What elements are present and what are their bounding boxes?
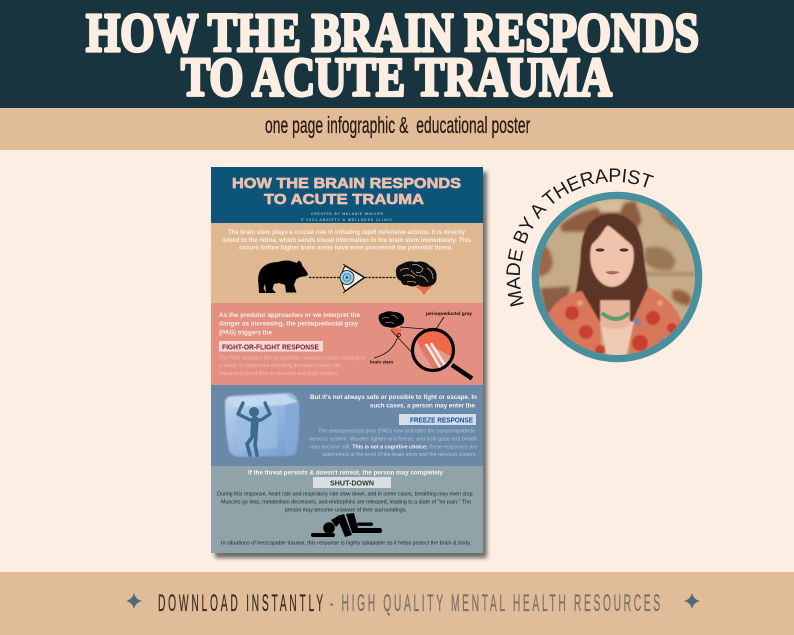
icon: collapsed person [311, 513, 382, 537]
intro text: occurs before higher brain areas have even processed the potential threat. [239, 246, 453, 252]
poster credits: CREATED BY MELANIE WALKER [311, 212, 384, 216]
freeze body text: determined at the level of the brain stem and the nervous system. [322, 452, 477, 458]
fight body text: enhanced blood flow to muscles and pupil dilation. [219, 371, 339, 377]
curved label: made by a therapist: MADE BY A THERAPIST [506, 168, 654, 307]
panel: poster header [211, 167, 483, 224]
frozen figure [238, 403, 270, 455]
intro text [222, 230, 472, 252]
hair [572, 214, 650, 326]
fight intro text: danger as increasing, the periaqueductal gray [219, 320, 359, 328]
panel: brain stem [211, 223, 483, 303]
brain stem wedge [391, 328, 402, 336]
small brain [378, 311, 404, 328]
freeze body text: The periaqueductal gray (PAG) now activates the parasympathetic [318, 428, 476, 434]
freeze body text: nervous system. Muscles tighten and freeze, and both gaze and breath [309, 436, 477, 442]
icon: brain [396, 261, 437, 295]
label: freeze response: FREEZE RESPONSE [410, 416, 473, 425]
poster title [232, 175, 461, 208]
freeze body text: may become still. This is not a cognitive choice; these responses are [310, 444, 477, 450]
fight intro text: (PAG) triggers the [219, 330, 273, 336]
therapist portrait [534, 195, 700, 360]
icon: left sparkle [126, 593, 142, 609]
intro text: The brain stem plays a crucial role in initiating rapid defensive actions. It is directly [228, 230, 466, 236]
icon: person frozen in ice cube [225, 393, 299, 457]
label: fight-or-flight response: FIGHT-OR-FLIGHT RESPONSE [222, 342, 319, 351]
dress [548, 286, 682, 355]
header banner [0, 0, 794, 108]
shut-down body text [217, 492, 474, 514]
closing text: In situations of inescapable trauma, this response is highly adaptable as it helps protect the brain & body. [221, 540, 471, 546]
poster title: HOW THE BRAIN RESPONDS [232, 175, 461, 192]
freeze body text [309, 428, 477, 458]
arrow: eye to brain [365, 276, 396, 278]
stone wall [539, 199, 695, 355]
shut-down body text: Muscles go limp, metabolism decreases, and endorphins are released, leading to a state of "no pain." The [221, 500, 471, 506]
title: TO ACUTE TRAUMA [181, 46, 612, 108]
intro text: linked to the retina, which sends visual information to the brain stem immediately. This [222, 238, 472, 244]
poster credits: © 2024 ANXIETY & WELLNESS CLINIC [301, 218, 393, 222]
fight intro text [219, 312, 361, 336]
pointer lines [374, 317, 444, 358]
diagram: periaqueductal gray [370, 311, 472, 378]
label: shut-down [313, 477, 391, 488]
footer band [0, 572, 794, 635]
eyes [596, 248, 604, 252]
freeze intro text: such cases, a person may enter the [370, 402, 476, 410]
freeze intro text: But it's not always safe or possible to fight or escape. In [310, 394, 477, 401]
poster credits [301, 212, 393, 222]
label: brain stem: brain stem [370, 360, 393, 364]
label: freeze response [399, 414, 476, 425]
arrow: bear to eye [309, 276, 340, 278]
face [590, 225, 634, 287]
icon: bear [258, 260, 308, 293]
subtitle band [0, 108, 794, 150]
necklace [602, 313, 629, 319]
poster title: TO ACUTE TRAUMA [264, 191, 424, 208]
panel: shut-down [211, 466, 483, 553]
footer text: download instantly: DOWNLOAD INSTANTLY [158, 589, 323, 616]
icon: right sparkle [684, 593, 700, 609]
dress flowers [565, 306, 677, 355]
label: shut-down: SHUT-DOWN [330, 479, 374, 488]
fight body text [219, 356, 365, 377]
shut-down intro text: If the threat persists & doesn't retreat, the person may completely [248, 470, 444, 476]
shut-down body text: person may become unaware of their surroundings. [285, 508, 407, 514]
subtitle: one page infographic & educational poster [265, 114, 530, 139]
magnifier [412, 328, 472, 378]
label: periaqueductal gray: periaqueductal gray [426, 311, 472, 316]
freeze intro text [310, 394, 477, 410]
footer text: high quality resources: - HIGH QUALITY MENTAL HEALTH RESOURCES [330, 589, 660, 616]
icon: eye [340, 264, 365, 293]
fight intro text: As the predator approaches or we interpret the [219, 312, 361, 319]
fight body text: a range of responses including increased heart rate, [219, 363, 343, 369]
chest [600, 320, 634, 356]
shut-down body text: During this response, heart rate and respiratory rate slow down, and in some cases, breathing may even stop. [217, 492, 474, 498]
fight body text: The PAG activates the sympathetic nervous system, leading to [219, 356, 365, 362]
panel: fight or flight [211, 303, 483, 385]
poster [211, 167, 487, 558]
title [86, 2, 699, 108]
mouth [605, 271, 620, 274]
panel: freeze response [211, 385, 483, 466]
